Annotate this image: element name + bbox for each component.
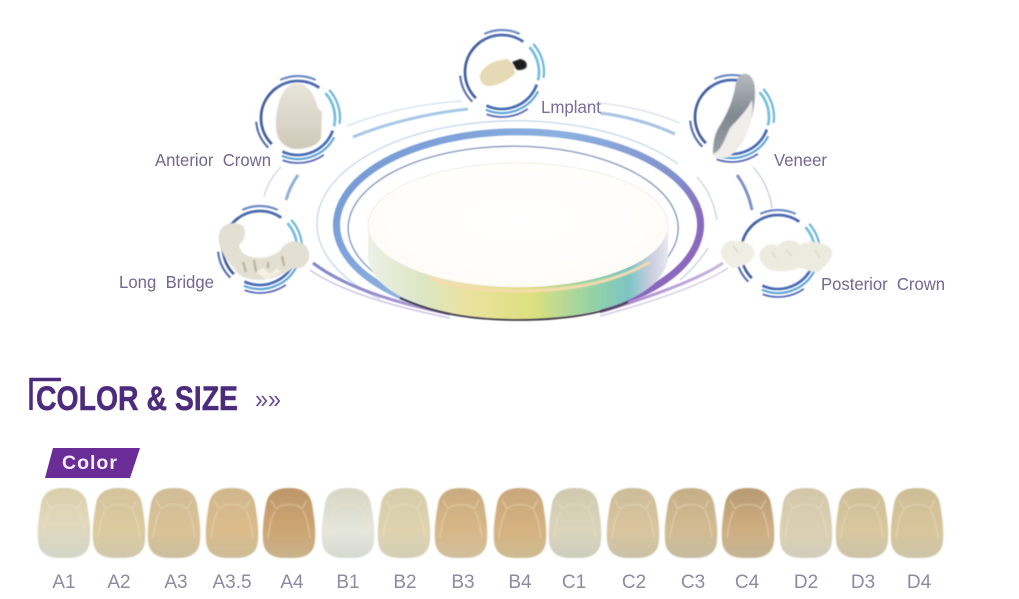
icon ring: implant — [439, 9, 565, 135]
shade labels: A3 — [164, 572, 188, 593]
disc bottom shadow edge — [400, 298, 628, 320]
icon: implant tooth — [480, 59, 527, 86]
shade labels: C3 — [681, 572, 705, 593]
disc — [368, 163, 668, 320]
shade labels: B1 — [336, 572, 360, 593]
shade labels: B2 — [393, 572, 417, 593]
label: Veneer: Veneer — [774, 150, 827, 170]
disc rim highlight — [430, 262, 650, 291]
disc side band — [368, 225, 668, 320]
icon: long bridge — [219, 223, 309, 280]
label: Anterior Crown: Anterior Crown — [155, 150, 271, 170]
shade labels: D2 — [794, 572, 818, 593]
shade labels: B3 — [451, 572, 475, 593]
shade labels — [52, 572, 932, 593]
heading: Color & Size — [31, 380, 281, 418]
icon ring: veneer — [669, 54, 795, 180]
shade labels: C4 — [735, 572, 760, 593]
main disc rings — [317, 121, 701, 311]
icon ring: anterior crown — [235, 55, 361, 181]
shade labels: A1 — [52, 572, 76, 593]
heading bracket — [31, 380, 61, 410]
color tag: Color — [62, 452, 118, 474]
shade labels: C1 — [562, 572, 586, 593]
shade tooth swatches — [38, 488, 943, 558]
icon: anterior crown tooth — [276, 83, 322, 149]
shade labels: A4 — [280, 572, 304, 593]
shade labels: B4 — [508, 572, 532, 593]
color tag — [45, 448, 140, 478]
shade labels: C2 — [622, 572, 646, 593]
heading chevrons: »» — [255, 384, 281, 414]
shade labels: D4 — [907, 572, 932, 593]
disc top — [368, 163, 668, 287]
icon ring: posterior crown — [715, 189, 841, 315]
label: Long Bridge: Long Bridge — [119, 272, 214, 292]
icon: posterior crown bridge — [721, 240, 832, 272]
icon: veneer tooth — [713, 74, 755, 158]
heading text: COLOR & SIZE — [36, 380, 238, 418]
shade labels: A3.5 — [212, 572, 252, 593]
label: Posterior Crown: Posterior Crown — [821, 274, 945, 294]
icon ring: long bridge — [197, 185, 323, 311]
shade labels: A2 — [107, 572, 131, 593]
shade labels: D3 — [851, 572, 875, 593]
connector arcs — [264, 101, 772, 318]
label: Implant: Lmplant — [541, 97, 601, 117]
